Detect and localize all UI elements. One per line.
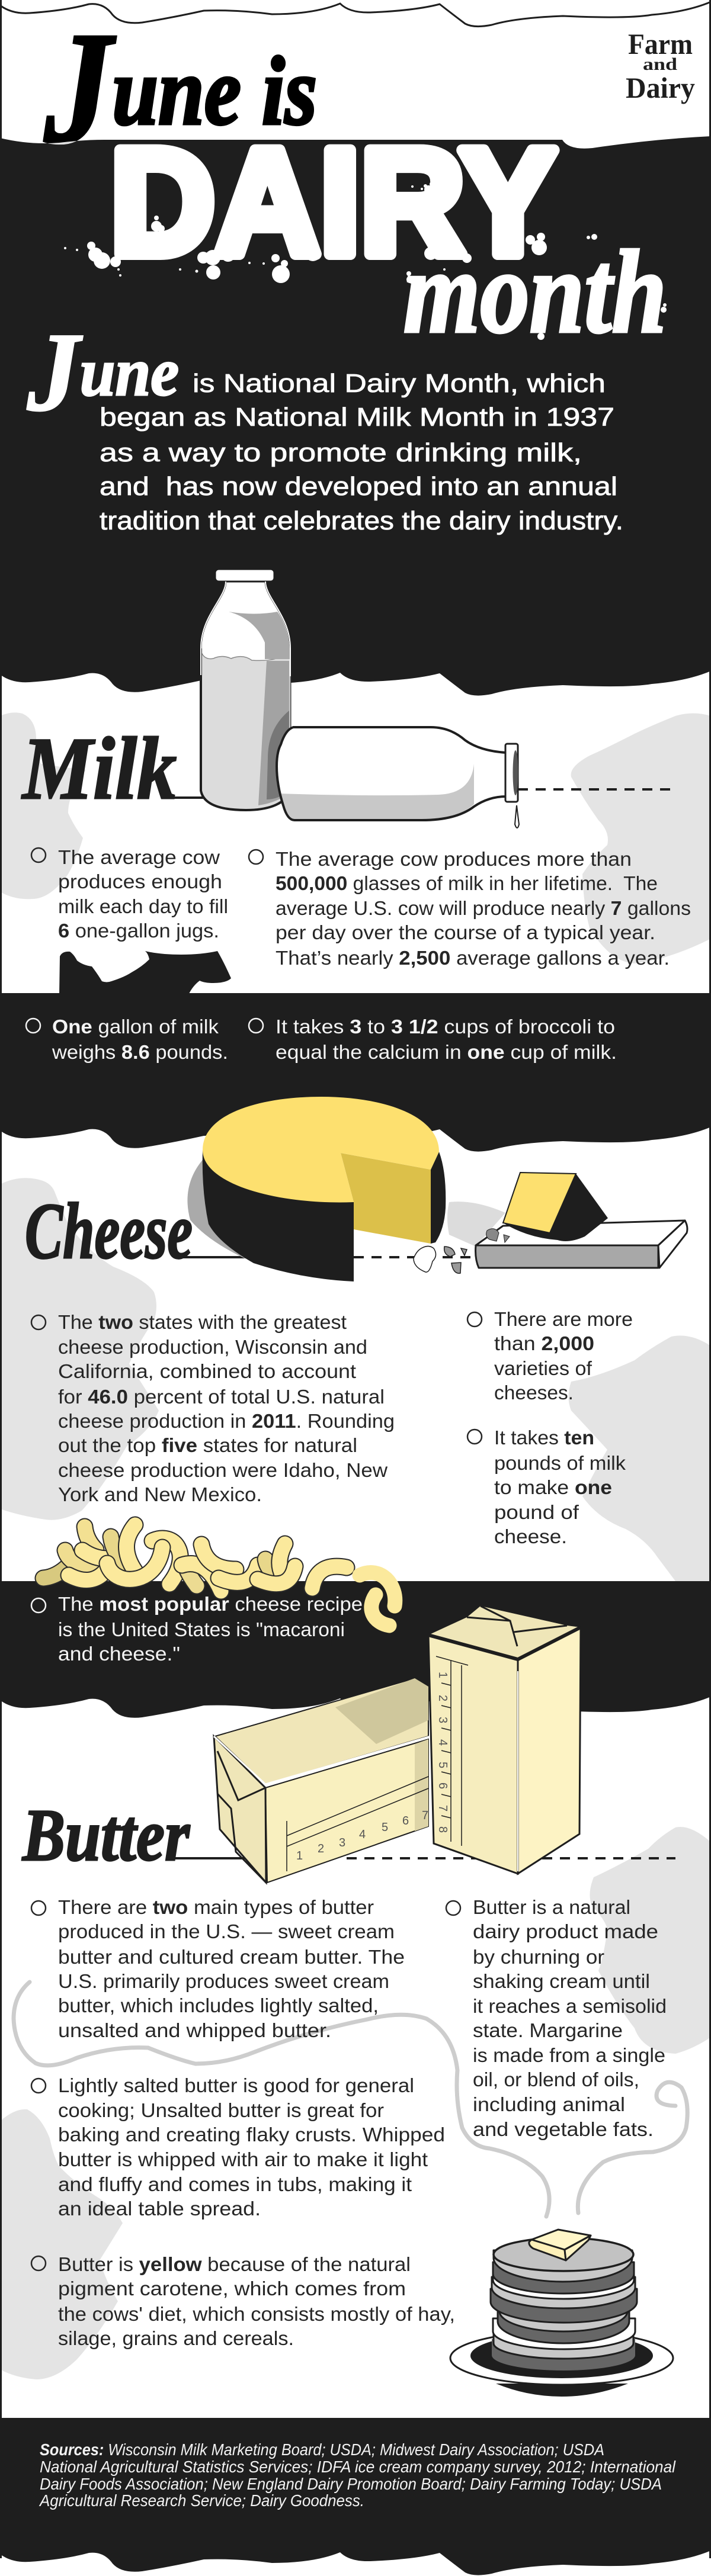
text: what butter is: oil, or blend of oils, (473, 2068, 639, 2090)
text: cheese varieties (467, 1308, 633, 1403)
cheese divider lines (175, 1256, 475, 1258)
text: ten pounds of milk: pounds of milk (494, 1452, 626, 1474)
text: most popular recipe (31, 1593, 363, 1665)
text: sources: Agricultural Research Service; Dairy Goodness. (39, 2491, 364, 2510)
text: cheese production: cheese production were Idaho, New (58, 1459, 387, 1481)
text: most popular recipe: The most popular cheese recipe (58, 1593, 363, 1615)
text: lifetime glasses: That’s nearly 2,500 average gallons a year. (276, 947, 670, 969)
text: gallon weight: weighs 8.6 pounds. (52, 1041, 228, 1063)
heading: Butter: Butter (21, 1795, 190, 1877)
text: types of butter: produced in the U.S. — sweet cream (58, 1920, 395, 1942)
text: why butter is yellow: pigment carotene, which comes from (58, 2278, 406, 2299)
icon: cheese wheel (187, 1097, 467, 1281)
text: ten pounds of milk: It takes ten (494, 1427, 594, 1448)
heading: Milk: Milk (21, 720, 177, 818)
icon: lying butter carton: 6 (402, 1814, 409, 1827)
text: cheese production: The two states with the greatest (58, 1311, 347, 1333)
text: most popular recipe: and cheese." (58, 1643, 180, 1665)
text: ten pounds of milk (467, 1427, 626, 1547)
intro text (100, 369, 623, 535)
text: butter uses: and fluffy and comes in tubs, making it (58, 2173, 412, 2195)
text: lifetime glasses: per day over the course of a typical year. (276, 921, 655, 943)
text: broccoli calcium: equal the calcium in one cup of milk. (276, 1041, 617, 1063)
text: butter uses (31, 2074, 445, 2220)
icon: cow silhouette (59, 951, 231, 995)
text: broccoli calcium (249, 1016, 617, 1063)
icon: lying butter carton: 1 (296, 1849, 303, 1862)
intro script word: June: J (27, 310, 83, 435)
text: why butter is yellow: silage, grains and cereals. (58, 2327, 294, 2349)
intro text: is National Dairy Month, which (193, 369, 606, 398)
intro text: tradition that celebrates the dairy industry. (100, 506, 623, 535)
logo: Farm and Dairy (626, 27, 695, 104)
icon: lying butter carton: 3 (339, 1836, 345, 1849)
text: what butter is: Butter is a natural (473, 1896, 630, 1918)
intro text: and has now developed into an annual (100, 472, 617, 501)
text: cheese varieties: varieties of (494, 1357, 592, 1379)
text: what butter is: by churning or (473, 1946, 604, 1968)
logo: Farm and Dairy: and (643, 54, 677, 74)
text: types of butter: butter, which includes lightly salted, (58, 1994, 379, 2016)
butter divider lines (168, 1857, 675, 1859)
text: cheese production: York and New Mexico. (58, 1483, 262, 1505)
text: cheese production (31, 1311, 395, 1505)
text: cheese production: California, combined to account (58, 1360, 356, 1382)
title: month: month (403, 227, 667, 358)
icon: standing butter carton: 5 (436, 1762, 449, 1768)
text: types of butter: butter and cultured cream butter. The (58, 1946, 405, 1968)
text: gallon weight: One gallon of milk (52, 1016, 219, 1038)
panel: butter background (0, 1697, 711, 2418)
text: why butter is yellow (31, 2253, 455, 2349)
icon: cheese wedge on board (447, 1173, 687, 1268)
text: lifetime glasses (249, 848, 691, 969)
icon: lying butter carton: 2 (318, 1842, 324, 1855)
text: cheese varieties: There are more (494, 1308, 633, 1330)
text: ten pounds of milk: to make one (494, 1476, 612, 1498)
text: butter uses: baking and creating flaky crusts. Whipped (58, 2124, 445, 2145)
decorative steam swirls (14, 1982, 687, 2217)
icon: standing butter carton: 3 (436, 1717, 449, 1723)
text: ten pounds of milk: pound of (494, 1501, 579, 1523)
logo: Farm and Dairy: Farm (628, 27, 693, 60)
logo: Farm and Dairy: Dairy (626, 71, 695, 104)
icon: standing butter carton: 2 (436, 1695, 449, 1701)
text: most popular recipe: is the United States is "macaroni (58, 1618, 345, 1640)
text: cheese production: cheese production in 2011. Rounding (58, 1410, 395, 1432)
text: butter uses: an ideal table spread. (58, 2198, 261, 2220)
icon: lying butter carton: 5 (382, 1821, 388, 1834)
icon: upright milk bottle (201, 569, 290, 810)
intro text: as a way to promote drinking milk, (100, 438, 582, 467)
text: lifetime glasses: The average cow produces more than (276, 848, 632, 870)
text: sources: Sources: Wisconsin Milk Marketing Board; USDA; Midwest Dairy Association; USDA (40, 2440, 604, 2459)
icon: lying butter carton: 7 (422, 1809, 428, 1822)
text: types of butter (31, 1896, 405, 2041)
text: butter uses: Lightly salted butter is good for general (58, 2074, 414, 2096)
icon: standing butter carton: 6 (436, 1782, 449, 1789)
text: what butter is: and vegetable fats. (473, 2118, 654, 2140)
text: cow enough milk: The average cow (58, 846, 220, 868)
text: what butter is: shaking cream until (473, 1970, 650, 1992)
text: why butter is yellow: Butter is yellow because of the natural (58, 2253, 411, 2275)
title: June is: J (42, 0, 116, 176)
text: sources: Dairy Foods Association; New England Dairy Promotion Board; Dairy Farming Today; USDA (40, 2475, 662, 2493)
text: lifetime glasses: 500,000 glasses of milk in her lifetime. The (276, 872, 658, 894)
milk divider lines (172, 789, 678, 798)
text: cheese production: out the top five states for natural (58, 1434, 357, 1456)
panel: bottom edge (0, 2551, 711, 2576)
icon: lying butter carton: 4 (359, 1828, 366, 1841)
heading: Cheese: Cheese (25, 1187, 193, 1276)
icon: lying butter carton (214, 1678, 431, 1883)
text: why butter is yellow: the cows' diet, which consists mostly of hay, (58, 2303, 455, 2325)
icon: pancake stack with butter (450, 2230, 673, 2397)
text: gallon weight (26, 1016, 228, 1063)
text: cheese production: for 46.0 percent of total U.S. natural (58, 1386, 385, 1408)
text: cow enough milk: produces enough (58, 871, 222, 892)
text: what butter is (446, 1896, 667, 2140)
icon: standing butter carton (428, 1606, 581, 1874)
icon: standing butter carton: 7 (436, 1805, 449, 1811)
icon: tipped milk bottle (277, 727, 519, 828)
text: lifetime glasses: average U.S. cow will produce nearly 7 gallons (276, 897, 691, 919)
text: ten pounds of milk: cheese. (494, 1525, 567, 1547)
title: June is: une is (112, 37, 317, 145)
text: cheese varieties: cheeses. (494, 1382, 574, 1403)
title: DAIRY: DAIRY (110, 118, 556, 287)
intro script word: June: une (80, 335, 179, 410)
text: what butter is: dairy product made (473, 1920, 658, 1942)
text: what butter is: state. Margarine (473, 2019, 623, 2041)
text: what butter is: it reaches a semisolid (473, 1995, 667, 2017)
text: cow enough milk: milk each day to fill (58, 895, 228, 917)
text: cheese production: cheese production, Wisconsin and (58, 1336, 367, 1358)
icon: standing butter carton: 1 (436, 1672, 449, 1678)
text: cow enough milk: 6 one-gallon jugs. (58, 920, 219, 942)
text: butter uses: cooking; Unsalted butter is great for (58, 2099, 384, 2121)
icon: standing butter carton: 8 (436, 1826, 449, 1833)
text: types of butter: There are two main types of butter (58, 1896, 374, 1918)
text: butter uses: butter is whipped with air to make it light (58, 2148, 428, 2170)
text: sources: National Agricultural Statistics Services; IDFA ice cream company survey, 2012; International (40, 2458, 676, 2476)
panel: white masthead (0, 0, 711, 149)
text: types of butter: U.S. primarily produces sweet cream (58, 1970, 389, 1992)
text: what butter is: including animal (473, 2093, 625, 2115)
text: sources (39, 2440, 676, 2510)
text: types of butter: unsalted and whipped butter. (58, 2019, 331, 2041)
text: broccoli calcium: It takes 3 to 3 1/2 cups of broccoli to (276, 1016, 615, 1038)
text: cow enough milk (31, 846, 228, 942)
icon: macaroni pile (43, 1525, 395, 1626)
panel: cheese background (0, 1127, 711, 1581)
panel: milk background (0, 671, 711, 993)
intro text: began as National Milk Month in 1937 (100, 403, 614, 432)
text: cheese varieties: than 2,000 (494, 1332, 594, 1354)
text: what butter is: is made from a single (473, 2044, 665, 2066)
icon: standing butter carton: 4 (436, 1739, 449, 1746)
